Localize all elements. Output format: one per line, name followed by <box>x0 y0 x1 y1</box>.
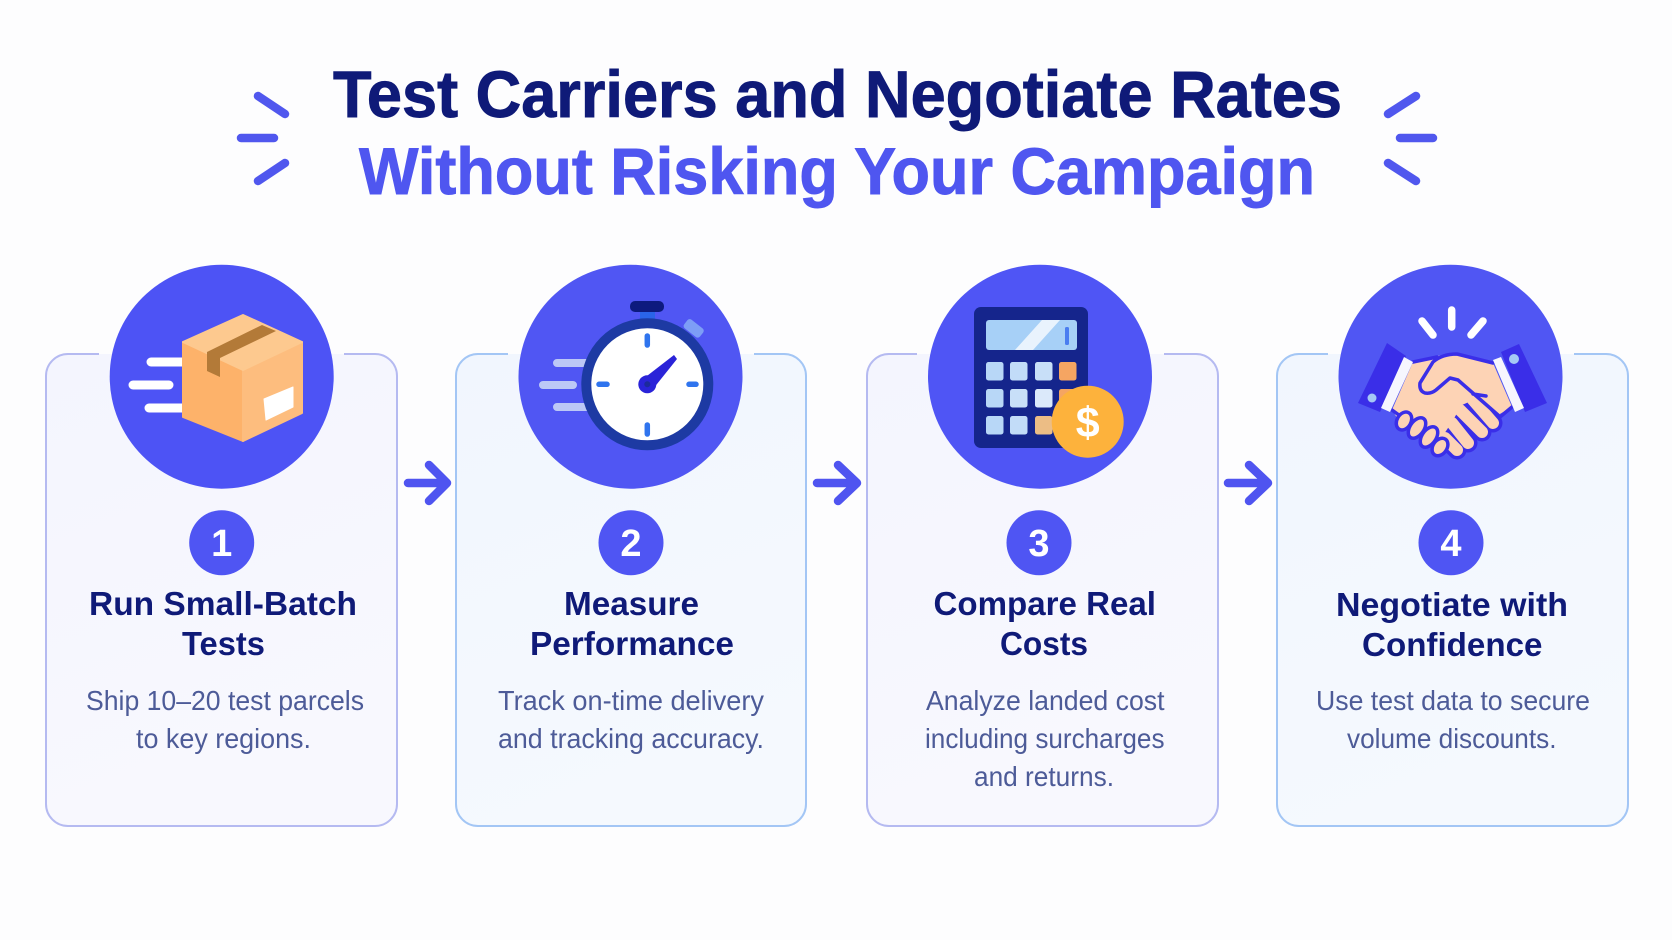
panel: step 1 <box>46 265 397 826</box>
clasped hands <box>1392 353 1512 440</box>
right hand fingers fill <box>1445 400 1493 450</box>
watch face <box>586 323 708 445</box>
title line 2: Without Risking Your Campaign <box>359 134 1315 208</box>
card 3 border <box>867 354 1218 826</box>
step 3 heading: Compare Real <box>934 585 1156 622</box>
step 2 heading <box>530 585 734 662</box>
panel: step 3 <box>867 265 1218 826</box>
number badge 2: 2 <box>620 523 642 565</box>
step 2 heading: Performance <box>530 625 734 662</box>
calculator screen <box>986 320 1077 350</box>
step 4 heading: Confidence <box>1362 626 1542 663</box>
speed lines <box>543 363 590 407</box>
step 4 heading <box>1336 586 1568 663</box>
step 4 heading: Negotiate with <box>1336 586 1568 623</box>
hand <box>643 355 677 389</box>
number badge 4: 4 <box>1440 523 1462 565</box>
step 1 description <box>86 685 364 754</box>
speed lines <box>133 362 190 408</box>
icon circle: calculator <box>928 265 1152 489</box>
sparkle lines <box>1422 310 1483 335</box>
panel: step 4 <box>1277 265 1628 826</box>
number badge 1 <box>189 510 254 575</box>
card 2 background <box>456 354 806 826</box>
arrow: step 1 to 2 <box>408 465 447 501</box>
calculator body <box>974 307 1088 448</box>
tick marks <box>599 336 696 434</box>
panel: step 2 <box>456 265 806 826</box>
step 3 description: Analyze landed cost <box>926 685 1165 716</box>
card 4 background <box>1277 354 1628 826</box>
arrow: step 3 to 4 <box>1228 465 1268 501</box>
step 1 description: to key regions. <box>136 723 311 754</box>
step 2 description: and tracking accuracy. <box>498 723 764 754</box>
dollar coin <box>1052 386 1124 458</box>
icon: left title sparks <box>241 96 285 181</box>
step 2 description: Track on-time delivery <box>498 685 764 716</box>
card 2 border <box>456 354 806 826</box>
dark sleeves <box>1358 343 1547 412</box>
crown <box>640 310 655 319</box>
number badge 2 <box>598 510 664 575</box>
dollar coin: $ <box>1076 399 1100 447</box>
number badge 3 <box>1006 510 1072 575</box>
icon circle: stopwatch <box>518 265 742 489</box>
right hand fingers outline <box>1445 400 1493 450</box>
title <box>333 57 1342 208</box>
number badge 3: 3 <box>1028 523 1050 565</box>
card 3 background <box>867 354 1218 826</box>
step 4 description: volume discounts. <box>1347 723 1556 754</box>
arrow: step 2 to 3 <box>817 465 857 501</box>
card 1 border <box>46 354 397 826</box>
side button <box>682 318 705 339</box>
step 4 description <box>1316 685 1590 754</box>
card 1 background <box>46 354 397 826</box>
hand outlines <box>1392 354 1512 418</box>
icon circle: handshake <box>1338 265 1562 489</box>
number badge 4 <box>1418 510 1484 575</box>
step 4 description: Use test data to secure <box>1316 685 1590 716</box>
step 3 description: and returns. <box>974 761 1114 792</box>
step 1 heading: Tests <box>182 625 265 662</box>
title line 1: Test Carriers and Negotiate Rates <box>333 57 1342 131</box>
icon: right title sparks <box>1388 96 1433 181</box>
white cuffs <box>1381 357 1524 412</box>
card 4 border <box>1277 354 1628 826</box>
number badge 1: 1 <box>211 523 232 565</box>
sleeve buttons <box>1368 394 1376 402</box>
step 3 description <box>925 685 1165 792</box>
step 3 description: including surcharges <box>925 723 1164 754</box>
step 2 description <box>498 685 764 754</box>
step 1 description: Ship 10–20 test parcels <box>86 685 364 716</box>
step 3 heading: Costs <box>1000 625 1088 662</box>
step 3 heading <box>934 585 1156 662</box>
box <box>183 315 302 441</box>
step 1 heading <box>89 585 357 662</box>
step 2 heading: Measure <box>564 585 699 622</box>
calculator keys <box>986 362 1076 434</box>
step 1 heading: Run Small-Batch <box>89 585 357 622</box>
icon circle: parcel <box>110 265 334 489</box>
fingers <box>1393 409 1451 459</box>
